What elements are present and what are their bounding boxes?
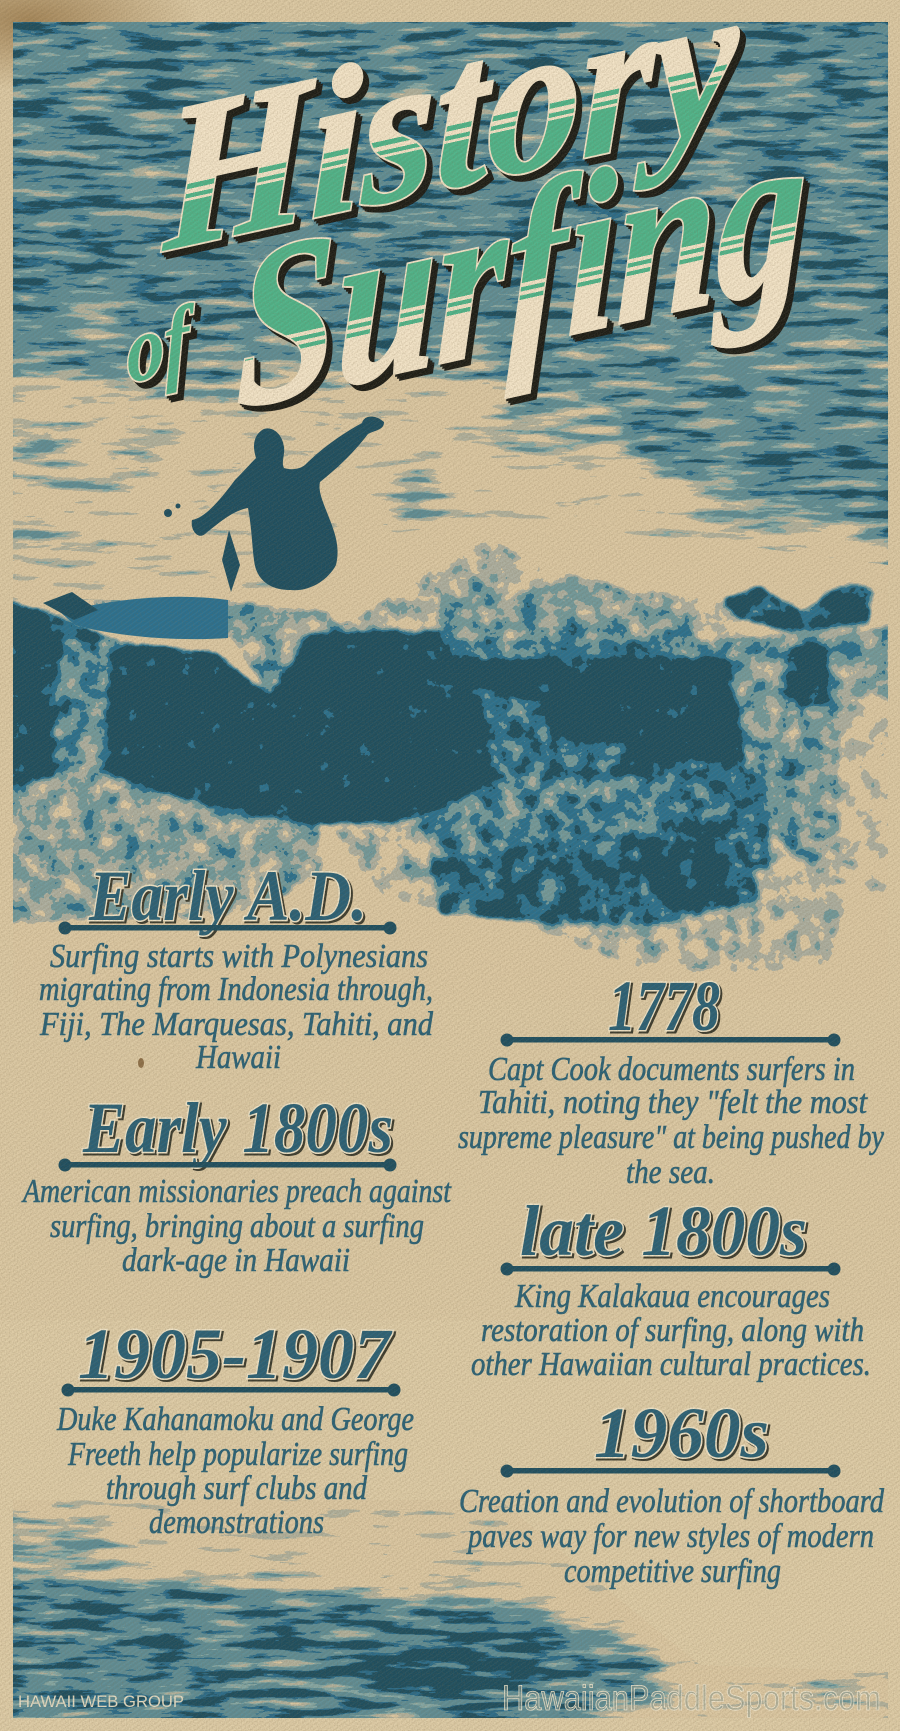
divider bar: [58, 922, 396, 934]
footer credit: Hawaii Web Group: HAWAII WEB GROUP: [18, 1692, 184, 1711]
body text: [21, 1173, 452, 1279]
body text: [471, 1278, 871, 1383]
divider bar: [500, 1464, 840, 1478]
heading: Early 1800s: Early 1800s: [82, 1088, 393, 1168]
heading: Early A.D.: Early A.D.: [88, 856, 367, 936]
body text: the sea.: [626, 1154, 715, 1191]
heading: late 1800s: late 1800s: [520, 1191, 807, 1271]
body text: Fiji, The Marquesas, Tahiti, and: [39, 1006, 434, 1043]
divider bar: [500, 1262, 840, 1276]
body text: Freeth help popularize surfing: [67, 1436, 408, 1473]
body text: King Kalakaua encourages: [514, 1278, 830, 1315]
ocean water at top: [13, 22, 888, 600]
section: Early A.D.: [39, 856, 434, 1076]
surfer silhouette: [164, 416, 384, 592]
title: History of Surfing: [124, 0, 808, 459]
body text: through surf clubs and: [106, 1470, 368, 1507]
body text: American missionaries preach against: [21, 1173, 452, 1210]
divider bar: [62, 1384, 400, 1396]
body text: [39, 938, 434, 1076]
divider bar: [500, 1034, 840, 1046]
heading: 1778: 1778: [608, 966, 720, 1046]
body text: demonstrations: [149, 1504, 324, 1541]
divider bar: [58, 1158, 396, 1172]
body text: Surfing starts with Polynesians: [50, 938, 428, 975]
surfboard: [43, 592, 228, 639]
ocean water at bottom: [13, 1500, 888, 1718]
body text: dark-age in Hawaii: [122, 1242, 350, 1279]
section: Early 1800s: [21, 1088, 452, 1279]
heading: 1960s: 1960s: [594, 1393, 769, 1473]
section: 1960s: [459, 1393, 885, 1590]
section: late 1800s: [471, 1191, 871, 1383]
body text: migrating from Indonesia through,: [39, 971, 433, 1008]
body text: [459, 1483, 885, 1590]
body text: [458, 1051, 885, 1191]
section: 1778: [458, 966, 885, 1191]
breaking wave: [13, 528, 888, 972]
body text: competitive surfing: [564, 1553, 781, 1590]
body text: Hawaii: [195, 1039, 281, 1076]
body text: Duke Kahanamoku and George: [56, 1401, 414, 1438]
section: 1905-1907: [56, 1314, 414, 1541]
heading: 1905-1907: 1905-1907: [78, 1314, 393, 1394]
title word: of: of: [124, 285, 198, 404]
body text: surfing, bringing about a surfing: [50, 1208, 424, 1245]
body text: [56, 1401, 414, 1541]
